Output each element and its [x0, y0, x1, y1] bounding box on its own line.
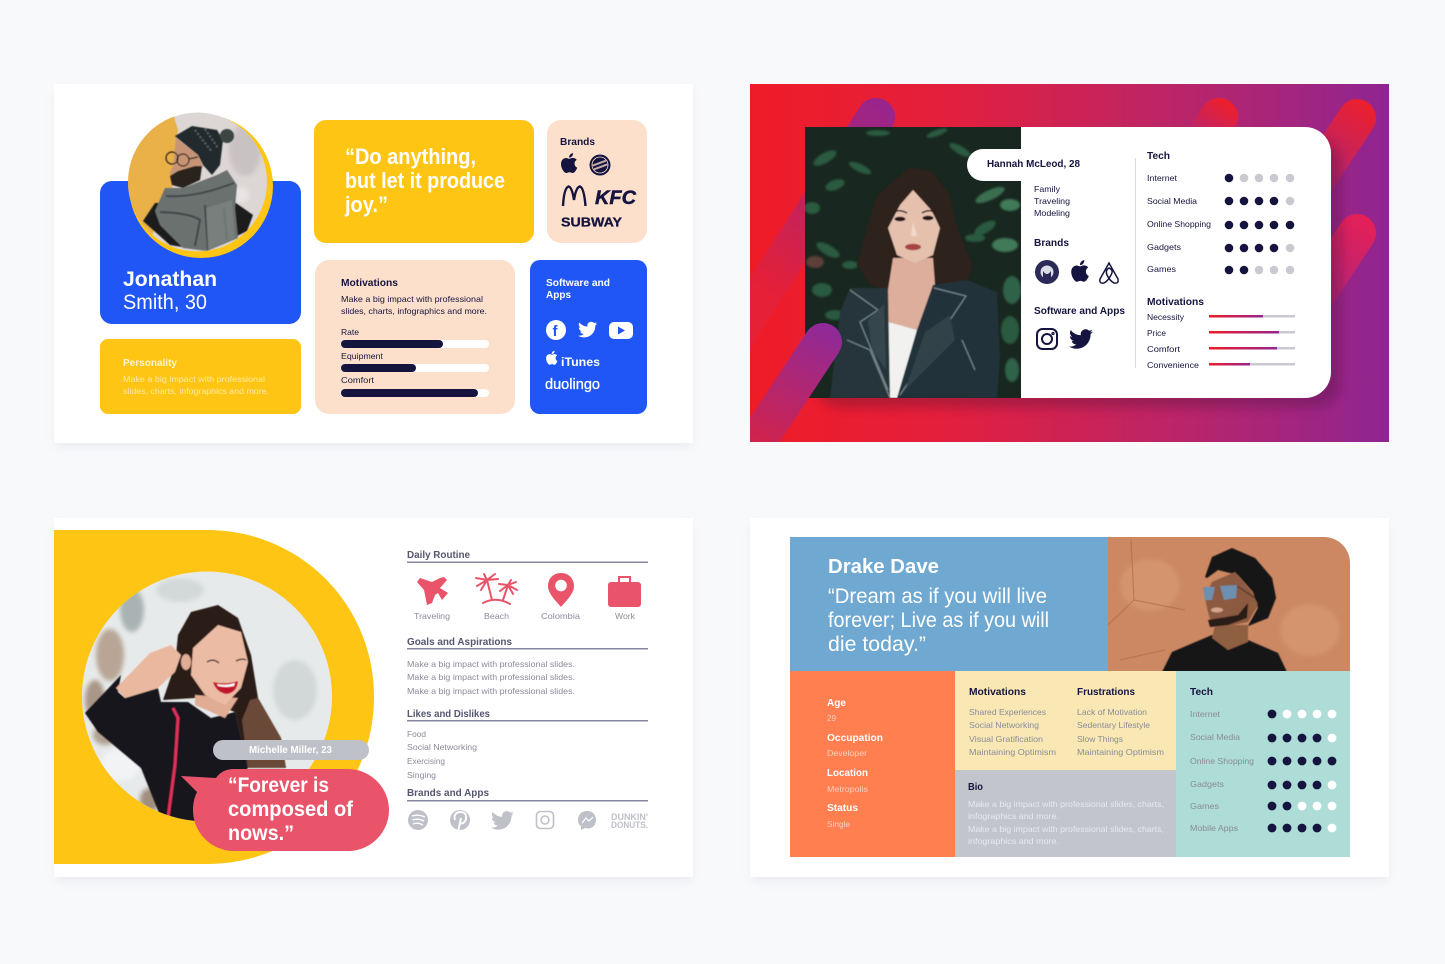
panel: Hannah McLeod persona: [720, 84, 1389, 460]
rating: games: Games: [1190, 801, 1219, 811]
decorative stripes: [720, 117, 1357, 360]
section: likes and dislikes: Likes and Dislikes: [407, 708, 490, 720]
motivations and frustrations panel: Social Networking: [969, 720, 1039, 730]
demographics panel: Status: [827, 802, 858, 814]
software and apps card: Apps: [546, 289, 571, 301]
interests: Traveling: [1034, 196, 1070, 206]
name: [123, 268, 217, 314]
icon: burger king: [590, 154, 610, 176]
motivations and frustrations panel: Motivations: [969, 686, 1026, 698]
logo: itunes: iTunes: [561, 355, 600, 369]
portrait photo: [125, 110, 270, 255]
bar: comfort: [341, 375, 489, 397]
name: Jonathan: [123, 268, 217, 291]
motivations card: Make a big impact with professional: [341, 294, 483, 304]
bio panel: Make a big impact with professional slides, charts,: [968, 824, 1164, 834]
section: likes and dislikes: Food: [407, 729, 426, 739]
icon: instagram: [536, 812, 554, 828]
motivations card: Motivations: [341, 277, 398, 289]
rating: games: Games: [1147, 264, 1176, 274]
brands: Brands: [1034, 237, 1069, 249]
rating: gadgets: [1190, 779, 1336, 789]
bar: equipment: Equipment: [341, 351, 384, 361]
section: likes and dislikes: Singing: [407, 770, 436, 780]
bar: equipment: [341, 351, 489, 372]
interests: Modeling: [1034, 208, 1070, 218]
section: brands and apps: [407, 787, 648, 832]
logo: itunes: [546, 351, 600, 369]
demographics panel: Developer: [827, 748, 867, 758]
icon: mcdonalds: [563, 186, 586, 206]
motivations and frustrations panel: [955, 671, 1176, 770]
bar: necessity: Necessity: [1147, 312, 1185, 322]
software and apps: Software and Apps: [1034, 305, 1125, 317]
icon: apple: [1071, 260, 1089, 282]
section: goals and aspirations: Make a big impact with professional slides.: [407, 686, 575, 696]
bio panel: infographics and more.: [968, 811, 1059, 821]
section: daily routine: Beach: [484, 611, 509, 621]
name: Smith, 30: [123, 291, 207, 314]
header: name and quote: [790, 537, 1108, 671]
quote bubble: “Forever is: [228, 774, 329, 797]
tech panel: Tech: [1190, 686, 1213, 698]
motivations bars: [1147, 296, 1295, 370]
quote card: but let it produce: [345, 168, 505, 193]
software and apps card: Software and: [546, 277, 610, 289]
rating: social media: [1190, 732, 1336, 742]
icon: instagram: [1037, 329, 1057, 349]
section: likes and dislikes: [407, 708, 648, 780]
section: goals and aspirations: Make a big impact with professional slides.: [407, 672, 575, 682]
rating: online shopping: [1190, 756, 1336, 766]
header: name and quote: Drake Dave: [828, 556, 939, 578]
logo: dunkin donuts: [611, 812, 648, 830]
icon: airbnb: [1100, 263, 1118, 283]
software and apps: [1034, 305, 1125, 349]
icon: youtube: [609, 322, 633, 339]
name pill: Hannah McLeod, 28: [987, 158, 1080, 170]
rating: online shopping: Online Shopping: [1147, 219, 1211, 229]
interests: [1034, 184, 1070, 218]
rating: games: [1147, 266, 1294, 274]
bio panel: Bio: [968, 781, 983, 793]
personality card: Personality: [123, 357, 177, 369]
header: name and quote: forever; Live as if you will: [828, 608, 1049, 632]
rating: internet: Internet: [1147, 173, 1178, 183]
icon: twitter: [1069, 329, 1093, 349]
bar: rate: Rate: [341, 327, 359, 337]
logo: duolingo: duolingo: [545, 377, 600, 393]
tech ratings: Tech: [1147, 150, 1170, 162]
rating: internet: Internet: [1190, 709, 1221, 719]
quote card: joy.”: [344, 192, 388, 217]
portrait photo: [1108, 537, 1350, 672]
personality card: [100, 339, 301, 414]
bio panel: [955, 770, 1176, 857]
section: goals and aspirations: [407, 636, 648, 696]
rating: gadgets: [1147, 244, 1294, 252]
section: daily routine: [407, 549, 648, 621]
icon: starbucks: [1035, 260, 1059, 284]
stripe over photo: [745, 342, 823, 460]
section: daily routine: Traveling: [414, 611, 450, 621]
profile card: [100, 110, 301, 324]
white card: [804, 126, 1331, 398]
motivations and frustrations panel: Visual Gratification: [969, 734, 1043, 744]
icon: briefcase: [608, 577, 641, 607]
logo: subway: SUBWAY: [561, 214, 622, 230]
panel: Drake Dave persona: [750, 518, 1389, 880]
icon: pinterest: [450, 810, 470, 832]
header: name and quote: die today.”: [828, 632, 926, 656]
panel: Michelle Miller persona: [54, 518, 693, 880]
logo: dunkin donuts: DONUTS.: [611, 820, 648, 830]
motivations and frustrations panel: Maintaining Optimism: [969, 747, 1056, 757]
motivations and frustrations panel: Sedentary Lifestyle: [1077, 720, 1150, 730]
bar: convenience: Convenience: [1147, 360, 1199, 370]
demographics panel: Metropolis: [827, 784, 868, 794]
bar: price: Price: [1147, 328, 1166, 338]
rating: online shopping: Online Shopping: [1190, 756, 1254, 766]
rating: internet: [1148, 174, 1294, 182]
icon: messenger: [578, 811, 596, 830]
icon: facebook: f: [552, 323, 558, 340]
icon: plane: [417, 577, 448, 605]
motivations and frustrations panel: Lack of Motivation: [1077, 707, 1147, 717]
software and apps card: [530, 260, 647, 414]
rating: internet: [1190, 709, 1336, 719]
brands card: Brands: [560, 137, 595, 148]
motivations card: slides, charts, infographics and more.: [341, 306, 487, 316]
portrait photo: [80, 568, 336, 826]
motivations and frustrations panel: Slow Things: [1077, 734, 1123, 744]
yellow backdrop: [54, 530, 374, 864]
demographics panel: Age: [827, 697, 846, 709]
personality card: slides, charts, infographics and more.: [123, 386, 269, 396]
icon: spotify: [408, 810, 428, 830]
rating: mobile apps: Mobile Apps: [1190, 823, 1238, 833]
portrait photo: [804, 126, 1021, 398]
section: daily routine: Colombia: [541, 611, 580, 621]
logo: dunkin donuts: DUNKIN': [611, 812, 648, 822]
rating: online shopping: [1147, 220, 1294, 230]
name pill: Michelle Miller, 23: [249, 745, 332, 756]
rating: games: [1190, 801, 1336, 811]
rating: gadgets: Gadgets: [1190, 779, 1224, 789]
bar: rate: [341, 327, 489, 348]
icon: facebook: [546, 320, 566, 340]
motivations and frustrations panel: Frustrations: [1077, 686, 1135, 698]
header: name and quote: “Dream as if you will live: [828, 584, 1047, 608]
section: daily routine: Daily Routine: [407, 549, 470, 561]
rating: gadgets: Gadgets: [1147, 242, 1181, 252]
rating: mobile apps: [1190, 823, 1336, 833]
section: daily routine: Work: [615, 611, 636, 621]
quote bubble: nows.”: [228, 822, 294, 845]
motivations and frustrations panel: Shared Experiences: [969, 707, 1046, 717]
motivations card: [315, 260, 515, 414]
section: goals and aspirations: Goals and Aspirations: [407, 636, 512, 648]
quote bubble: [181, 769, 389, 851]
quote bubble: composed of: [228, 798, 354, 821]
name pill: [967, 149, 1080, 181]
quote card: “Do anything,: [345, 144, 476, 169]
icon: location pin: [548, 573, 574, 607]
bar: comfort: Comfort: [341, 375, 375, 385]
quote card: [314, 120, 534, 243]
demographics panel: 29: [827, 713, 836, 723]
section: goals and aspirations: Make a big impact with professional slides.: [407, 659, 575, 669]
brands card: [547, 120, 647, 243]
icon: palm trees: [476, 574, 517, 604]
panel: Jonathan Smith persona: [54, 84, 693, 446]
section: brands and apps: Brands and Apps: [407, 787, 489, 799]
rating: social media: Social Media: [1147, 196, 1197, 206]
name pill: [213, 740, 369, 760]
tech ratings: [1147, 150, 1294, 274]
bio panel: infographics and more.: [968, 836, 1059, 846]
tech panel: [1176, 671, 1350, 857]
brands: [1034, 237, 1118, 284]
rating: social media: [1147, 196, 1294, 206]
bar: comfort: Comfort: [1147, 344, 1181, 354]
interests: Family: [1034, 184, 1061, 194]
rating: social media: Social Media: [1190, 732, 1240, 742]
demographics panel: Single: [827, 819, 850, 829]
section: likes and dislikes: Social Networking: [407, 742, 477, 752]
demographics panel: Location: [827, 767, 868, 779]
icon: apple: [561, 153, 577, 173]
icon: twitter: [491, 811, 514, 830]
demographics panel: [790, 671, 955, 857]
motivations bars: Motivations: [1147, 296, 1204, 308]
demographics panel: Occupation: [827, 732, 883, 744]
logo: KFC: KFC: [595, 188, 636, 209]
personality card: Make a big impact with professional: [123, 374, 265, 384]
icon: twitter: [578, 322, 597, 337]
motivations and frustrations panel: Maintaining Optimism: [1077, 747, 1164, 757]
bio panel: Make a big impact with professional slides, charts,: [968, 799, 1164, 809]
section: likes and dislikes: Exercising: [407, 756, 445, 766]
